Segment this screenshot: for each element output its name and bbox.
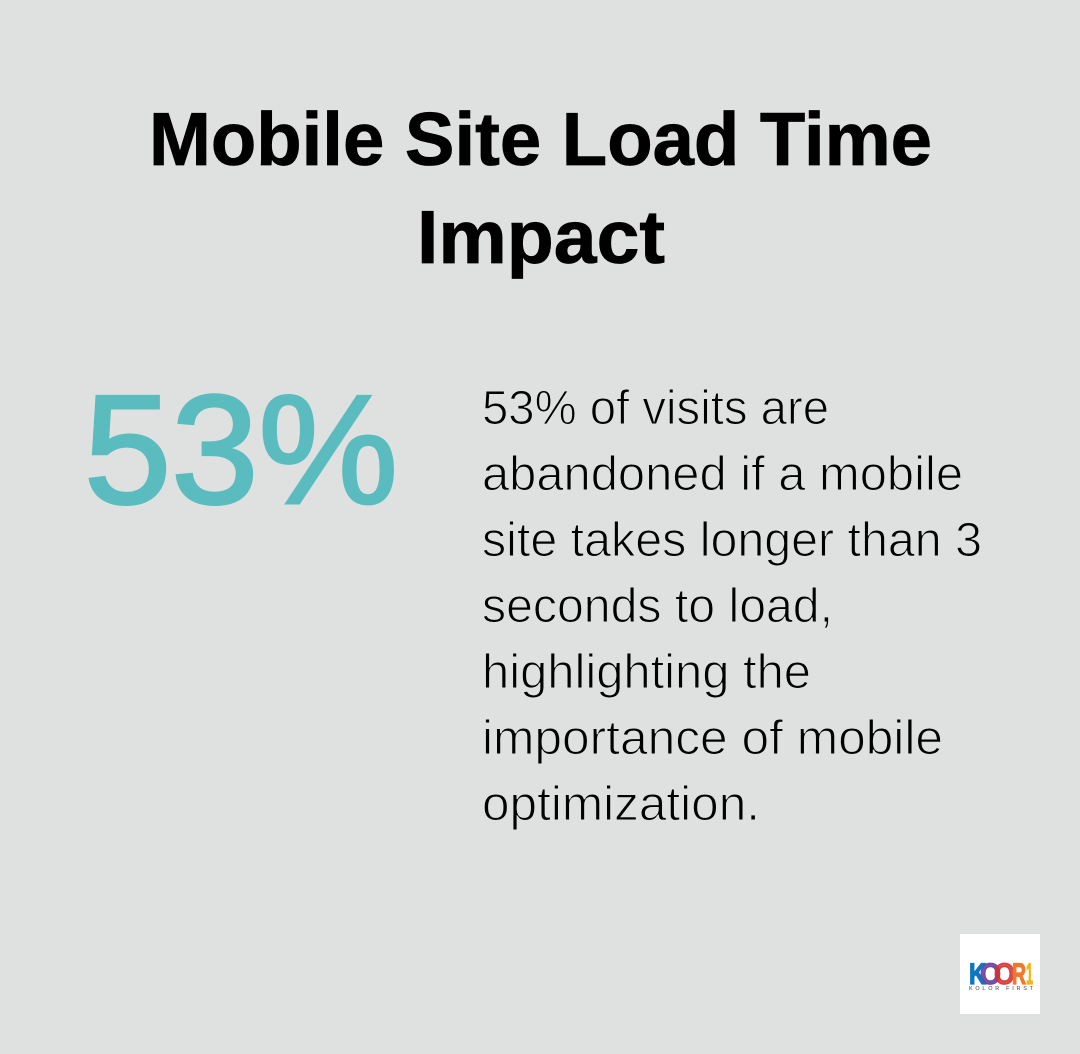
big statistic: 53%: 53% [84,363,398,536]
title: Mobile Site Load Time [149,97,932,181]
description text: highlighting the [482,646,811,699]
description text: seconds to load, [482,580,833,633]
description text [482,382,982,831]
logo tagline: KOLOR FIRST [969,986,1034,992]
logo: Koori Kolor First: 1 [1026,958,1033,991]
logo: Koori Kolor First [960,934,1040,1014]
description text: importance of mobile [482,712,943,765]
title: Impact [417,195,665,279]
logo wordmark: K [969,958,986,991]
description text: site takes longer than 3 [482,514,982,567]
logo wordmark: O [980,958,1001,991]
description text: optimization. [482,778,760,831]
logo wordmark: R [1012,958,1026,991]
description text: 53% of visits are [482,382,829,435]
description text: abandoned if a mobile [482,448,963,501]
title [149,97,932,279]
logo wordmark [969,958,1033,991]
logo wordmark: O [994,958,1015,991]
